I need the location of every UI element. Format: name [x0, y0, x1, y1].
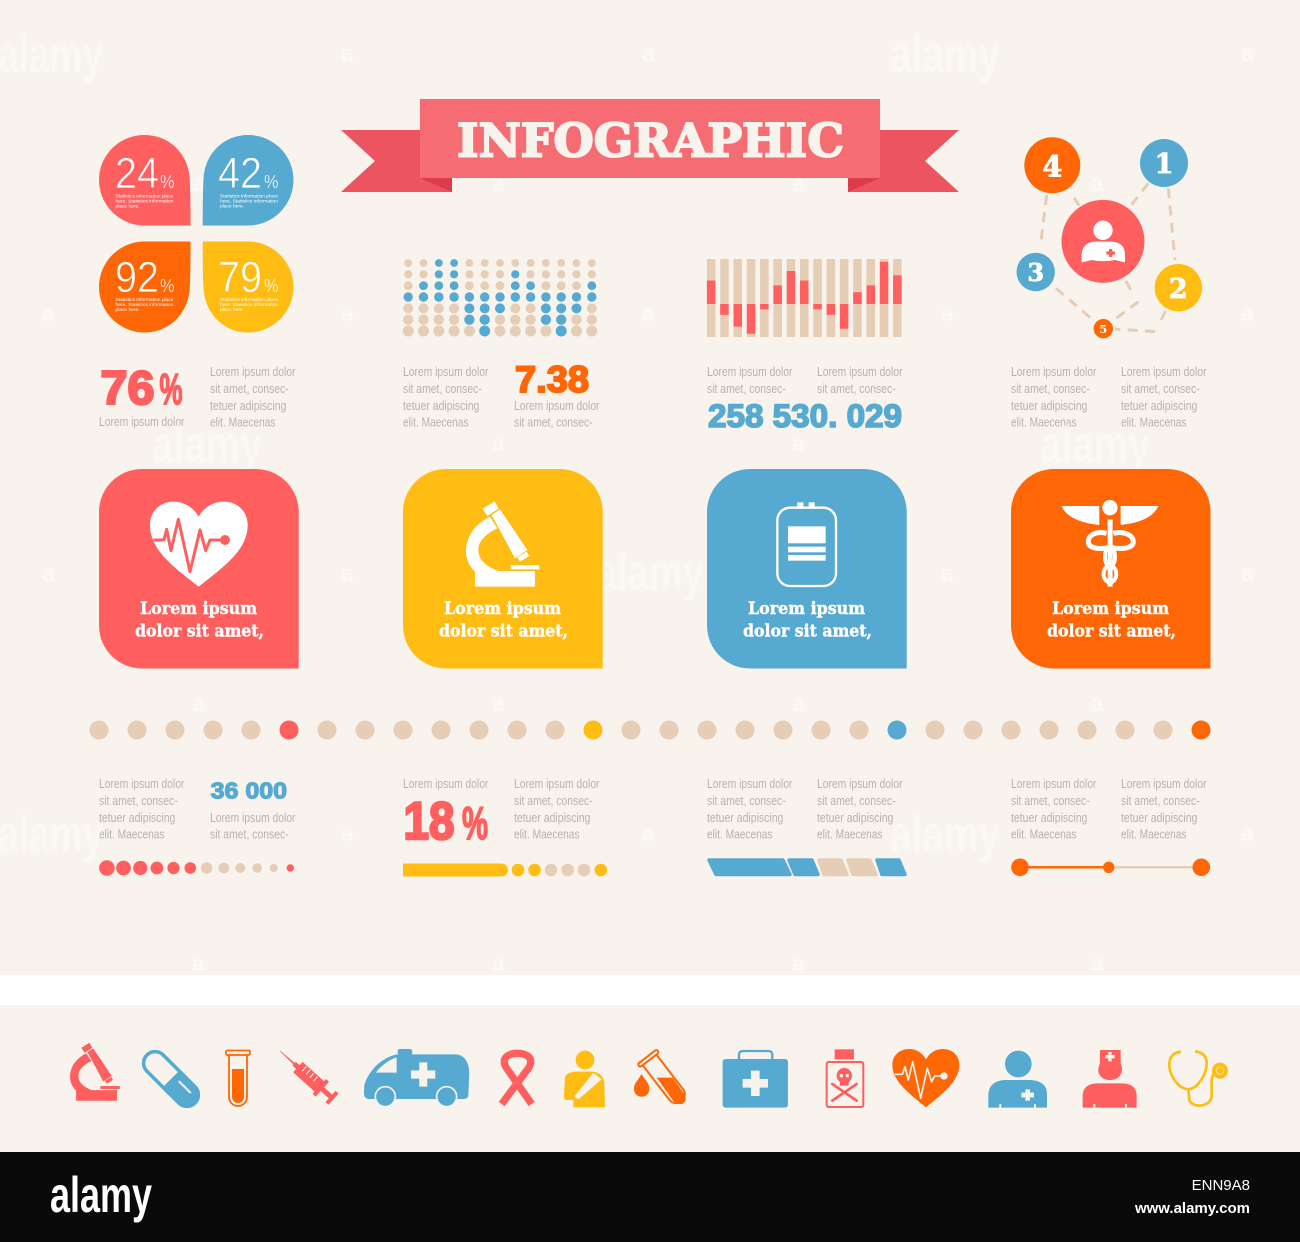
text block: row 3 column 4 right: tetuer adipiscing: [1121, 811, 1197, 825]
card: blood bag: Lorem ipsum: [748, 599, 865, 619]
footer logo: alamy: [50, 1167, 152, 1223]
watermark: stock image marks: a: [941, 300, 954, 326]
watermark: stock image marks: [0, 26, 1254, 976]
watermark: stock image marks: a: [792, 170, 805, 196]
node 5: 5: [1099, 322, 1107, 336]
text block: row 3 column 4 left: elit. Maecenas: [1011, 828, 1076, 842]
icon: blood bag: [777, 502, 836, 586]
diverging bar chart: [707, 259, 902, 337]
icon: first aid kit: [723, 1051, 788, 1108]
progress: yellow bar and dots: [403, 864, 607, 876]
text block: row 3 column 1 caption: [210, 811, 296, 842]
text block: row 3 column 4 right: elit. Maecenas: [1121, 828, 1186, 842]
watermark: stock image marks: a: [42, 300, 55, 326]
text block: row 3 column 1 caption: sit amet, consec-: [210, 828, 289, 842]
watermark: stock image marks: a: [341, 560, 354, 586]
card: heart: Lorem ipsum: [140, 599, 257, 619]
text block: row 3 column 3 right: elit. Maecenas: [817, 828, 882, 842]
petal: 79 percent: Statistics information place: [220, 297, 278, 302]
text block: row 1 column 2 caption: sit amet, consec-: [514, 416, 593, 430]
watermark: stock image marks: a: [192, 170, 205, 196]
watermark: stock image marks: a: [492, 170, 505, 196]
watermark: stock image marks: alamy: [0, 26, 103, 84]
watermark: stock image marks: a: [341, 820, 354, 846]
text block: row 1 column 4 right: Lorem ipsum dolor: [1121, 365, 1206, 379]
watermark: stock image marks: alamy: [152, 416, 262, 474]
text block: row 1 column 4 right: elit. Maecenas: [1121, 416, 1186, 430]
icon: test tube and drop: [634, 1049, 691, 1109]
icon: doctor: [988, 1051, 1047, 1108]
icon: person with sling: [564, 1051, 605, 1107]
card: microscope: [403, 469, 603, 668]
node 2: 2: [1169, 274, 1188, 305]
text block: row 1 column 2 paragraph: elit. Maecenas: [403, 416, 468, 430]
petal: 92 percent: place here.: [116, 307, 140, 312]
stat: 18%: %: [462, 797, 488, 849]
card: microscope: Lorem ipsum: [444, 599, 561, 619]
watermark: stock image marks: alamy: [596, 544, 704, 602]
stat: 18%: [404, 792, 488, 851]
watermark: stock image marks: a: [792, 430, 805, 456]
text block: row 1 column 3 right: sit amet, consec-: [817, 382, 896, 396]
watermark: stock image marks: a: [1241, 820, 1254, 846]
progress: line slider: [1011, 858, 1210, 876]
text block: row 3 column 1 paragraph: Lorem ipsum dolor: [99, 777, 184, 791]
icon: syringe: [273, 1044, 340, 1107]
icon: red microscope: [70, 1043, 120, 1101]
text block: row 1 column 4 right: sit amet, consec-: [1121, 382, 1200, 396]
petal: 42 percent: %: [264, 172, 278, 192]
watermark: stock image marks: a: [1091, 170, 1104, 196]
icon: heart with pulse: [150, 502, 248, 587]
network diagram: [1016, 137, 1202, 338]
text block: row 1 column 4 left: tetuer adipiscing: [1011, 399, 1087, 413]
node: centre person: [1061, 200, 1144, 283]
title ribbon: [341, 99, 959, 192]
text block: row 1 column 2 caption: Lorem ipsum dolor: [514, 399, 600, 413]
node 4: [1024, 137, 1080, 193]
dot matrix chart: [403, 259, 597, 336]
icon: stethoscope: [1169, 1050, 1228, 1106]
watermark: stock image marks: a: [192, 690, 205, 716]
watermark: stock image marks: a: [492, 690, 505, 716]
text block: row 1 column 1 paragraph: tetuer adipiscing: [210, 399, 286, 413]
text block: row 1 column 2 paragraph: sit amet, consec-: [403, 382, 482, 396]
icon: ambulance: [364, 1049, 469, 1107]
footer url: www.alamy.com: [1134, 1200, 1250, 1217]
card: caduceus: dolor sit amet,: [1047, 622, 1176, 642]
stat: 76%: [100, 361, 182, 414]
node 2: [1155, 264, 1202, 311]
petal: 42 percent: here. Statistics information: [220, 198, 278, 204]
watermark: stock image marks: a: [42, 560, 55, 586]
icon: microscope: [466, 501, 539, 587]
watermark: stock image marks: a: [1241, 560, 1254, 586]
text block: row 3 column 3 left: tetuer adipiscing: [707, 811, 783, 825]
stat: 36 000: 36 000: [211, 778, 287, 804]
text block: row 3 column 3 right: tetuer adipiscing: [817, 811, 893, 825]
watermark: stock image marks: alamy: [890, 26, 1000, 84]
text block: row 3 column 4 left: Lorem ipsum dolor: [1011, 777, 1096, 791]
watermark: stock image marks: a: [1091, 950, 1104, 976]
icon: caduceus: [1062, 500, 1158, 587]
text block: row 3 column 4 right: [1121, 777, 1206, 842]
text block: row 3 column 4 left: tetuer adipiscing: [1011, 811, 1087, 825]
petal: 79 percent: here. Statistics information: [220, 302, 278, 307]
text block: row 3 column 2 paragraph: sit amet, consec-: [514, 794, 593, 808]
watermark: stock image marks: a: [341, 40, 354, 66]
text block: row 1 column 1 paragraph: [210, 365, 296, 430]
text block: row 1 column 4 left: Lorem ipsum dolor: [1011, 365, 1096, 379]
node 1: 1: [1155, 149, 1173, 180]
watermark: stock image marks: a: [1241, 300, 1254, 326]
text block: row 1 column 3 left: Lorem ipsum dolor: [707, 365, 792, 379]
petal: 92 percent: 92: [115, 253, 159, 302]
text block: row 1 column 1 paragraph: sit amet, consec-: [210, 382, 289, 396]
node 4: 4: [1042, 150, 1062, 184]
petal: 79 percent: [203, 242, 294, 332]
icon: capsule: [139, 1047, 203, 1111]
progress: slanted segments: [709, 860, 905, 874]
node 5: [1094, 319, 1113, 338]
text block: row 1 column 4 right: [1121, 365, 1206, 430]
text block: row 3 column 3 left: elit. Maecenas: [707, 828, 772, 842]
watermark: stock image marks: a: [492, 950, 505, 976]
stat: 7.38: 7.38: [515, 359, 589, 400]
card: heart: [99, 469, 299, 668]
card: heart: dolor sit amet,: [135, 622, 264, 642]
text block: row 1 column 3 right: Lorem ipsum dolor: [817, 365, 902, 379]
text block: row 1 column 2 paragraph: Lorem ipsum dolor: [403, 365, 488, 379]
text block: row 3 column 2 paragraph: elit. Maecenas: [514, 828, 580, 842]
text block: row 3 column 1 paragraph: sit amet, consec-: [99, 794, 178, 808]
text block: row 1 column 3 right: [817, 365, 902, 396]
petal: 24 percent: 24: [115, 149, 159, 198]
text block: row 3 column 2 paragraph: tetuer adipiscing: [514, 811, 590, 825]
petal: 42 percent: [203, 135, 294, 226]
petal: 79 percent: %: [264, 276, 278, 296]
petal: 24 percent: place here.: [116, 204, 140, 208]
watermark: stock image marks: a: [341, 300, 354, 326]
watermark: stock image marks: alamy: [0, 806, 103, 864]
icon: nurse: [1083, 1050, 1137, 1108]
petal: 24 percent: Statistics information place: [116, 194, 174, 198]
watermark: stock image marks: a: [642, 40, 655, 66]
text block: row 3 column 3 right: sit amet, consec-: [817, 794, 896, 808]
watermark: stock image marks: a: [941, 560, 954, 586]
text block: row 1 column 2 paragraph: [403, 365, 488, 430]
watermark: stock image marks: a: [1241, 40, 1254, 66]
card: blood bag: [707, 469, 907, 668]
text block: row 3 column 4 right: sit amet, consec-: [1121, 794, 1200, 808]
stat: 76%: 76: [100, 361, 154, 414]
icon: awareness ribbon: [502, 1053, 532, 1104]
petal: 79 percent: 79: [218, 253, 262, 302]
card: caduceus: Lorem ipsum: [1052, 599, 1169, 619]
watermark: stock image marks: a: [642, 300, 655, 326]
watermark: stock image marks: alamy: [1040, 416, 1150, 474]
text block: row 3 column 4 left: sit amet, consec-: [1011, 794, 1090, 808]
stat: 258 530. 029: 258 530. 029: [708, 398, 902, 434]
petal: 24 percent: %: [160, 172, 174, 192]
card: caduceus: [1011, 469, 1210, 668]
watermark: stock image marks: a: [1091, 690, 1104, 716]
watermark: stock image marks: a: [792, 690, 805, 716]
text block: row 1 column 1 paragraph: elit. Maecenas: [210, 416, 276, 430]
text block: row 3 column 1 paragraph: [99, 777, 184, 842]
text block: row 1 column 1 paragraph: Lorem ipsum dolor: [210, 365, 296, 379]
timeline dots: [90, 720, 1210, 740]
text block: row 1 column 4 left: [1011, 365, 1096, 430]
icon: poison bottle: [827, 1049, 863, 1107]
text block: row 3 column 3 left: [707, 777, 792, 842]
node 3: [1016, 253, 1055, 291]
text block: row 1 column 4 right: tetuer adipiscing: [1121, 399, 1197, 413]
text block: row 1 column 1 caption: Lorem ipsum dolor: [99, 415, 184, 429]
petal: 42 percent: 42: [218, 149, 262, 198]
petal: 42 percent: place here.: [220, 204, 244, 208]
icon: orange heart: [892, 1049, 959, 1107]
footer bar: [0, 1152, 1300, 1242]
text block: row 3 column 2 caption: Lorem ipsum dolor: [403, 777, 488, 791]
text block: row 3 column 1 paragraph: elit. Maecenas: [99, 828, 164, 842]
text block: row 3 column 4 right: Lorem ipsum dolor: [1121, 777, 1206, 791]
text block: row 3 column 1 caption: Lorem ipsum dolor: [210, 811, 296, 825]
node 1: [1140, 139, 1188, 187]
watermark: stock image marks: a: [792, 950, 805, 976]
progress: shrinking dots: [99, 860, 294, 876]
card: blood bag: dolor sit amet,: [743, 622, 872, 642]
text block: row 3 column 3 right: Lorem ipsum dolor: [817, 777, 902, 791]
node 3: 3: [1027, 258, 1044, 287]
text block: row 3 column 4 left: [1011, 777, 1096, 842]
watermark: stock image marks: a: [192, 950, 205, 976]
watermark: stock image marks: a: [492, 430, 505, 456]
text block: row 1 column 4 left: sit amet, consec-: [1011, 382, 1090, 396]
petal: 92 percent: %: [160, 276, 174, 296]
text block: row 3 column 2 paragraph: [514, 777, 600, 842]
petal: 42 percent: Statistics information place: [220, 194, 278, 198]
petal: 92 percent: [99, 242, 190, 332]
watermark: stock image marks: a: [642, 820, 655, 846]
stat: 18%: 18: [404, 792, 454, 851]
footer image id: ENN9A8: [1192, 1177, 1250, 1194]
icon: test tube: [226, 1050, 250, 1106]
text block: row 3 column 1 paragraph: tetuer adipiscing: [99, 811, 175, 825]
text block: row 3 column 3 left: sit amet, consec-: [707, 794, 786, 808]
petal: 24 percent: here. Statistics information: [116, 198, 174, 204]
text block: row 1 column 3 left: [707, 365, 792, 396]
text block: row 3 column 2 paragraph: Lorem ipsum dolor: [514, 777, 600, 791]
card: microscope: dolor sit amet,: [439, 622, 568, 642]
text block: row 3 column 3 right: [817, 777, 902, 842]
watermark: stock image marks: alamy: [890, 806, 1000, 864]
text block: row 1 column 2 paragraph: tetuer adipiscing: [403, 399, 479, 413]
petal: 24 percent: [99, 135, 190, 226]
text block: row 3 column 3 left: Lorem ipsum dolor: [707, 777, 792, 791]
stat: 76%: %: [160, 365, 182, 414]
text block: row 1 column 2 caption: [514, 399, 600, 430]
text block: row 1 column 3 left: sit amet, consec-: [707, 382, 786, 396]
title: INFOGRAPHIC: [457, 114, 844, 168]
text block: row 1 column 4 left: elit. Maecenas: [1011, 416, 1076, 430]
petal: 92 percent: here. Statistics information: [116, 302, 174, 307]
petal: 92 percent: Statistics information place: [116, 297, 174, 302]
petal: 79 percent: place here.: [220, 307, 244, 312]
